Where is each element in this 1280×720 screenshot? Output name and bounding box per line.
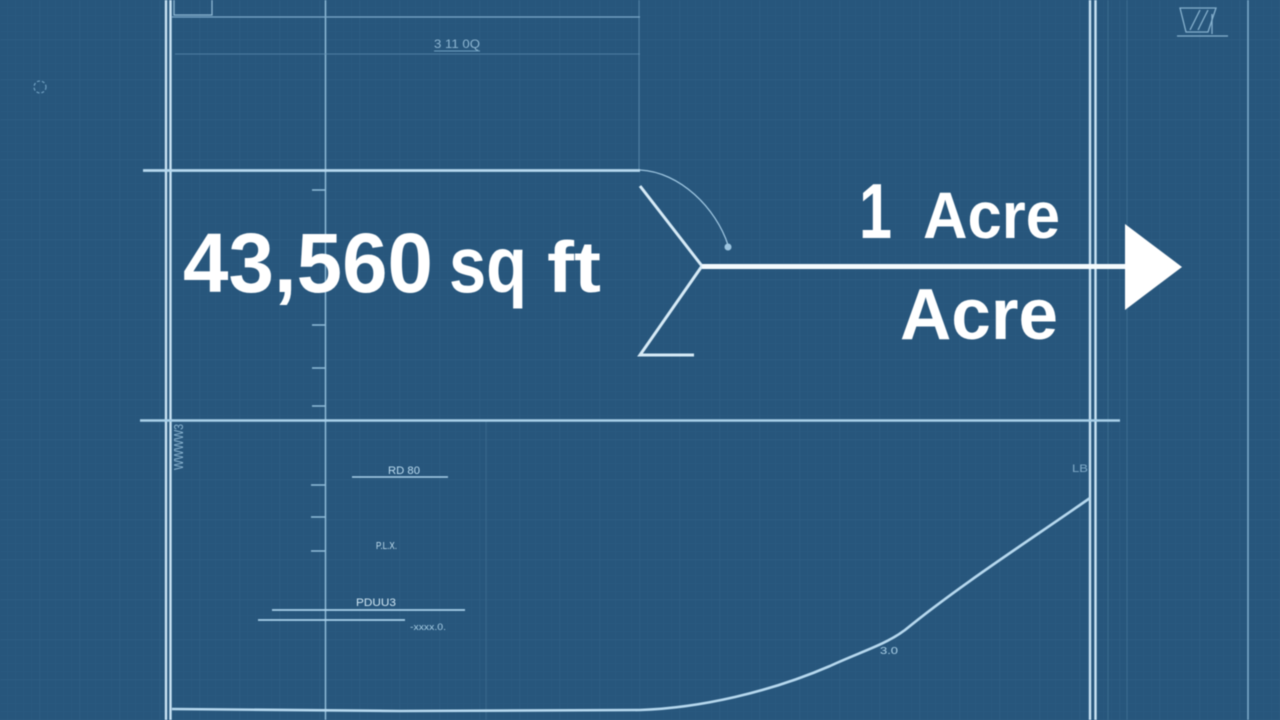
bottom boundary curve	[172, 498, 1090, 711]
annotation: RD 80: RD 80	[388, 465, 420, 477]
heading: 43,560 sq ft: sq	[449, 220, 527, 309]
chevron tail of arrow	[640, 186, 702, 355]
curved dimension arc	[640, 170, 732, 250]
label: 1 Acre	[859, 167, 1060, 255]
annotation: RD 80	[352, 465, 448, 477]
annotation right edge: LB	[1072, 463, 1088, 475]
label: 1 Acre: 1	[859, 167, 892, 255]
annotation: PDUU3	[258, 597, 465, 632]
side annotation block: WWWW3	[171, 424, 186, 470]
heading: 43,560 sq ft: ft	[547, 228, 601, 308]
annotation: P.L.X: P.L.X.	[376, 541, 397, 552]
ruler ticks	[311, 190, 325, 551]
top dimension note: 3 11 0Q	[434, 37, 480, 51]
label: 1 Acre: Acre	[923, 178, 1060, 252]
arrow pointing to 1 Acre	[702, 224, 1182, 310]
compass mark left	[34, 81, 46, 93]
drawing stamp icon top right	[1177, 8, 1228, 36]
heading: 43,560 sq ft	[183, 216, 601, 310]
annotation: PDUU3: -xxxx.0.	[410, 622, 446, 632]
heading: 43,560 sq ft: 43,560	[183, 216, 433, 310]
annotation on curve: 3.0	[880, 646, 899, 657]
corner mark top left	[174, 0, 212, 15]
label: Acre: Acre	[900, 275, 1058, 355]
annotation: PDUU3: PDUU3	[356, 597, 396, 609]
